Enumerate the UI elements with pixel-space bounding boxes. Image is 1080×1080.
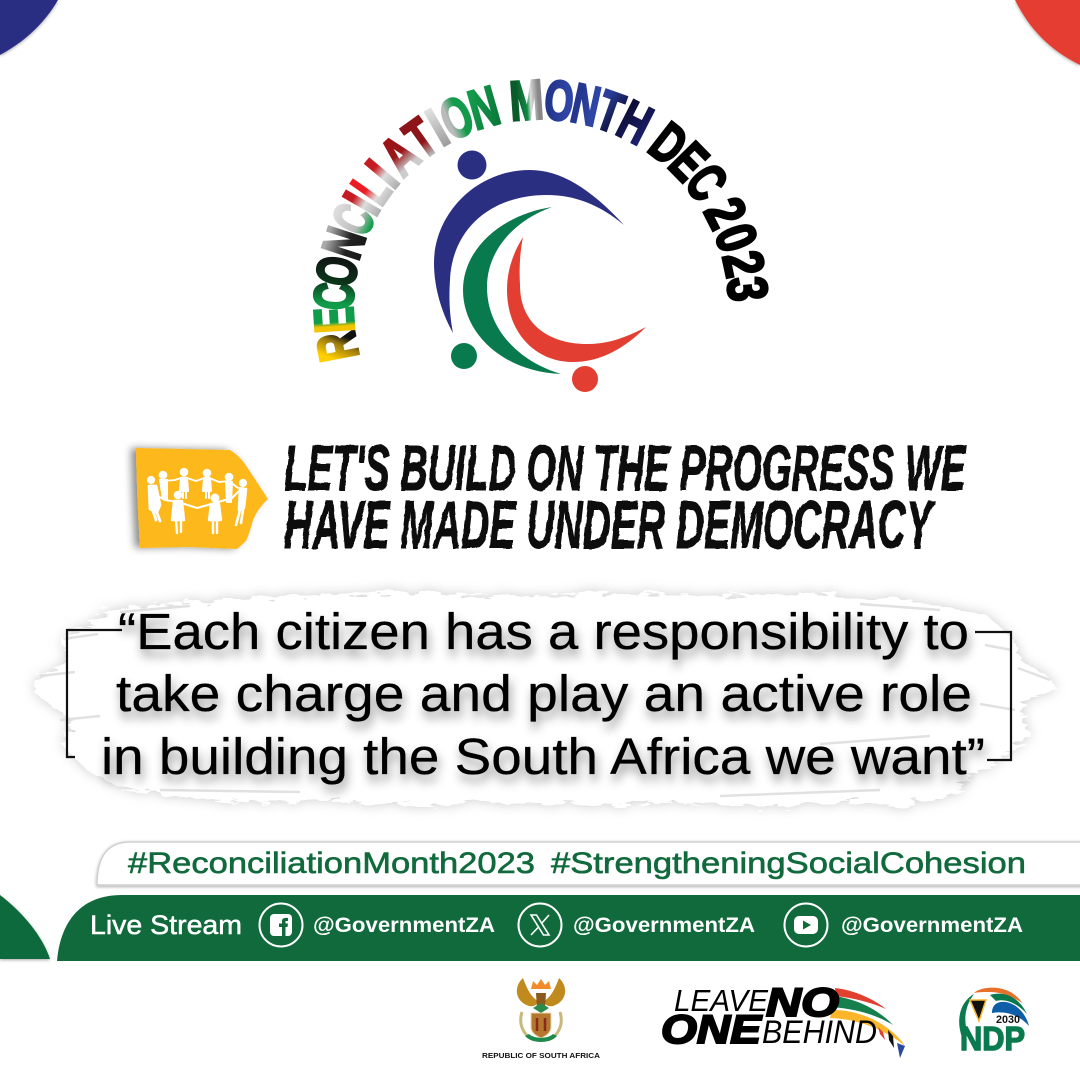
hashtags: #StrengtheningSocialCohesion xyxy=(551,847,1026,880)
wordmark xyxy=(661,981,877,1052)
arc title: C xyxy=(320,195,387,244)
arc title: C xyxy=(673,153,739,213)
arc title: E xyxy=(303,305,367,335)
arc title: 2 xyxy=(692,188,759,238)
icon: X xyxy=(518,904,562,946)
wordmark: ONE xyxy=(661,1008,763,1052)
quote text: take charge and play an active role xyxy=(116,665,972,722)
social bar xyxy=(57,895,1080,961)
icon: green figure xyxy=(451,207,561,374)
arc title: M xyxy=(508,69,546,133)
heading xyxy=(284,432,967,563)
arc title: N xyxy=(462,74,506,142)
wordmark: NO xyxy=(766,981,839,1025)
wordmark: BEHIND xyxy=(762,1014,877,1050)
quote text: “Each citizen has a responsibility to xyxy=(118,603,969,660)
quote text xyxy=(101,603,985,785)
bracket xyxy=(67,630,1011,760)
arc title: A xyxy=(369,124,432,188)
icon: blue figure xyxy=(434,150,624,333)
arc title: 2 xyxy=(710,246,776,282)
hashtag bar xyxy=(97,842,1080,885)
handle: facebook: @GovernmentZA xyxy=(313,914,495,937)
icon: red figure xyxy=(507,237,646,392)
arc title: I xyxy=(331,182,392,224)
arc title: 0 xyxy=(703,216,770,260)
icon: facebook xyxy=(260,904,302,946)
arc title: 3 xyxy=(715,274,779,304)
logo: Reconciliation Month xyxy=(303,69,779,392)
year: 2030 xyxy=(996,1014,1020,1026)
arc title: T xyxy=(588,80,631,146)
handle: YouTube: @GovernmentZA xyxy=(841,914,1023,937)
arc title: E xyxy=(657,132,719,193)
live stream label: Live Stream xyxy=(90,910,242,940)
hashtags: #ReconciliationMonth2023 xyxy=(128,847,535,880)
hashtags xyxy=(128,847,1026,880)
handle: X: @GovernmentZA xyxy=(573,914,755,937)
NDP wordmark: NDP xyxy=(960,1020,1025,1057)
panel: quote on torn brush xyxy=(32,592,1058,808)
corner: top-left navy xyxy=(0,0,58,55)
arc title: N xyxy=(311,221,379,266)
arc title: I xyxy=(354,149,410,199)
arc title: L xyxy=(340,162,403,215)
logo: NDP 2030 xyxy=(959,988,1029,1057)
arc title: O xyxy=(431,84,483,153)
corner: bottom-left green xyxy=(0,895,50,959)
arc title: I xyxy=(416,97,458,158)
icon: YouTube xyxy=(784,904,828,946)
arc title: O xyxy=(305,252,371,291)
arc title: O xyxy=(542,69,576,134)
icon: yellow tag with people circle xyxy=(136,448,268,549)
brush texture xyxy=(32,592,1058,808)
wordmark: LEAVE xyxy=(674,983,768,1018)
arc title: N xyxy=(566,72,605,139)
arc title: C xyxy=(303,281,367,312)
logo: Leave No One Behind xyxy=(661,981,905,1058)
arc title: D xyxy=(638,111,699,178)
arc title: R xyxy=(305,327,372,366)
arc title: T xyxy=(394,107,449,171)
arc title xyxy=(303,69,779,366)
quote text: in building the South Africa we want” xyxy=(101,728,985,785)
caption: REPUBLIC OF SOUTH AFRICA xyxy=(482,1051,601,1060)
corner: top-right red xyxy=(1015,0,1080,65)
arc title: H xyxy=(608,89,662,157)
logo: coat of arms xyxy=(482,978,601,1060)
